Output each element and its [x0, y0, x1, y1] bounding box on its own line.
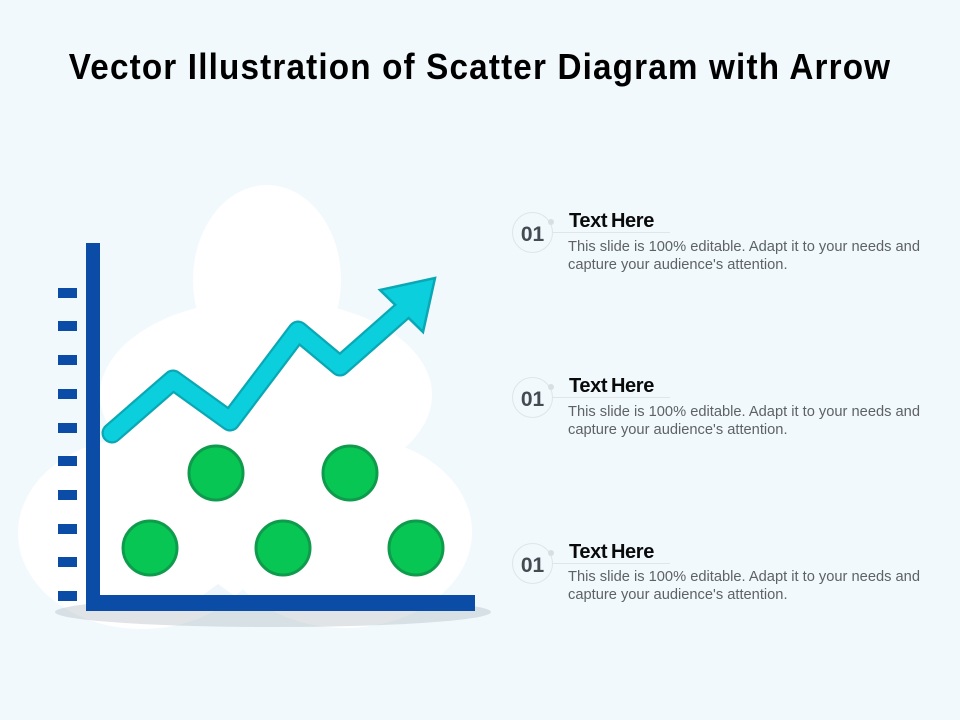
description 1 — [568, 239, 920, 273]
number badge 3 — [512, 543, 553, 584]
chart axes — [86, 243, 475, 611]
title: Vector Illustration of Scatter Diagram with Arrow — [69, 46, 891, 87]
description 2: This slide is 100% editable. Adapt it to your needs and — [568, 404, 920, 420]
number badge 3: 01 — [521, 554, 544, 577]
scatter diagram illustration — [18, 185, 491, 629]
text item 3 — [512, 541, 920, 603]
description 3: This slide is 100% editable. Adapt it to your needs and — [568, 569, 920, 585]
heading 2: Text Here — [569, 375, 654, 397]
cloud notch — [203, 584, 233, 595]
number badge 2 — [512, 377, 553, 418]
scatter points — [123, 446, 443, 575]
description 1: This slide is 100% editable. Adapt it to your needs and — [568, 239, 920, 255]
text item 2 — [512, 375, 920, 438]
number badge 2: 01 — [521, 388, 544, 411]
heading 1: Text Here — [569, 210, 654, 232]
description 1: capture your audience's attention. — [568, 257, 788, 273]
text item 1 — [512, 210, 920, 273]
heading 3: Text Here — [569, 541, 654, 563]
axis tick marks — [58, 288, 77, 601]
number badge 1 — [512, 212, 553, 253]
description 3: capture your audience's attention. — [568, 587, 788, 603]
number badge 1: 01 — [521, 223, 544, 246]
cloud background — [18, 185, 472, 629]
description 2: capture your audience's attention. — [568, 422, 788, 438]
rising arrow — [112, 278, 435, 433]
description 3 — [568, 569, 920, 603]
ground shadow — [55, 597, 491, 627]
description 2 — [568, 404, 920, 438]
